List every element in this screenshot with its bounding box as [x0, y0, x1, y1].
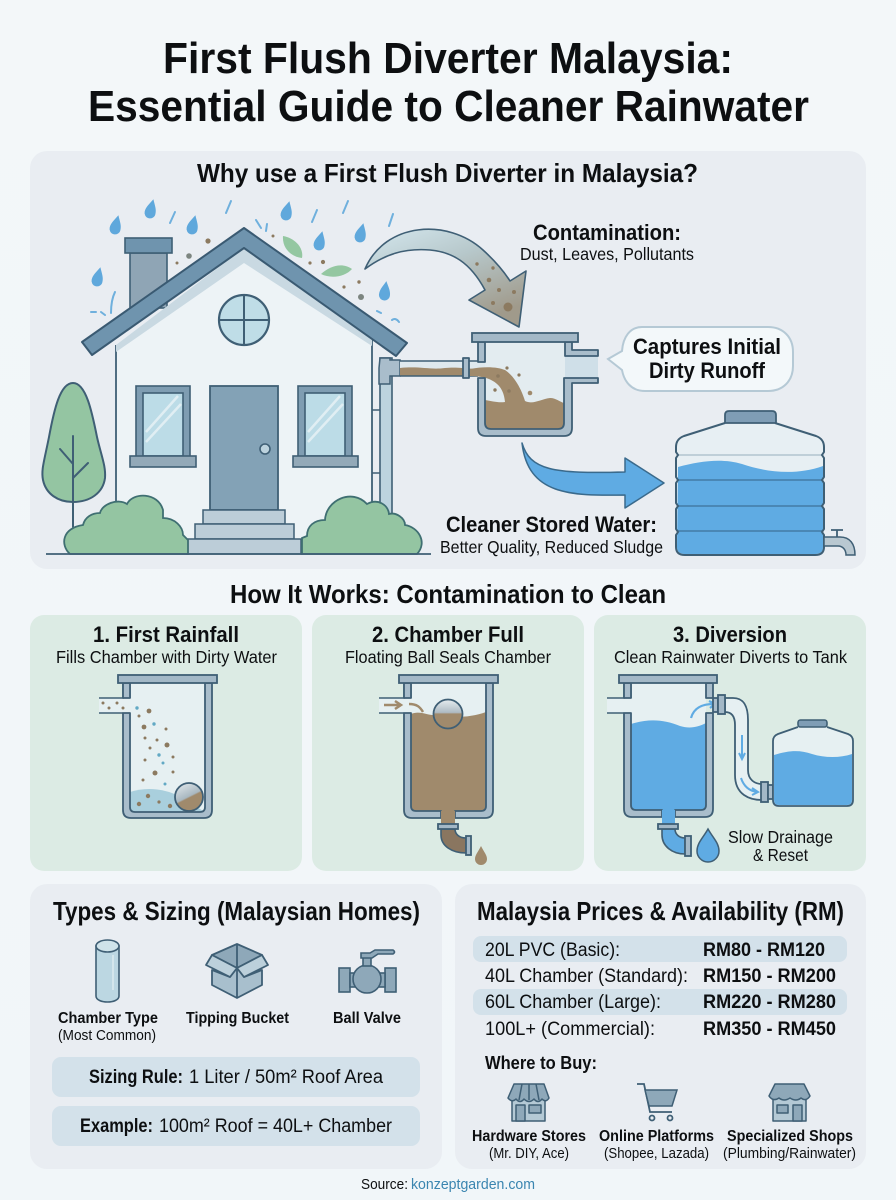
icon: hardware store	[508, 1084, 549, 1121]
label: online platforms: Online Platforms	[599, 1128, 714, 1145]
label: chamber type	[58, 1010, 158, 1044]
price table	[473, 936, 847, 1040]
label: hardware stores: Hardware Stores	[472, 1128, 586, 1145]
sizing rule bar: Sizing Rule:	[89, 1067, 183, 1088]
floating ball at bottom	[175, 783, 203, 811]
label: ball valve: Ball Valve	[333, 1010, 401, 1027]
source line	[361, 1177, 535, 1193]
text: contamination	[520, 220, 694, 264]
tap	[824, 537, 855, 555]
text: contamination: Contamination:	[533, 220, 681, 245]
step 1 chamber diagram	[99, 675, 217, 818]
curved flow arrow	[691, 701, 715, 718]
heading: why use: Why use a First Flush Diverter in Malaysia?	[197, 158, 698, 188]
source line: konzeptgarden.com	[411, 1177, 535, 1193]
step 1 description: Fills Chamber with Dirty Water	[56, 647, 277, 667]
icon: chamber cylinder	[96, 940, 119, 1002]
price table: RM80 - RM120	[703, 940, 825, 961]
dirty drip	[475, 846, 487, 865]
price table: RM350 - RM450	[703, 1019, 836, 1040]
shade below roof	[116, 248, 372, 352]
illustration: rain and debris	[90, 198, 399, 322]
sizing rule bar	[52, 1057, 420, 1097]
chamber walls	[478, 378, 598, 436]
illustration: diverter chamber	[400, 333, 598, 436]
arrow: clean water to tank	[522, 443, 664, 508]
chimney	[125, 238, 172, 308]
price table: 100L+ (Commercial):	[485, 1019, 655, 1040]
panel: step 3 diversion	[594, 615, 866, 871]
icon: ball valve	[339, 950, 396, 993]
example bar	[52, 1106, 420, 1146]
price table: 60L Chamber (Large):	[485, 992, 661, 1013]
label: online platforms	[599, 1128, 714, 1162]
heading: where to buy: Where to Buy:	[485, 1053, 597, 1073]
label: hardware stores: (Mr. DIY, Ace)	[489, 1146, 569, 1162]
step 2 heading: 2. Chamber Full	[372, 622, 524, 647]
callout: captures initial dirty runoff: Captures Initial	[633, 334, 781, 359]
illustration: storage tank	[676, 411, 855, 555]
title: Essential Guide to Cleaner Rainwater	[88, 82, 809, 131]
small tank	[773, 720, 853, 806]
price table: RM150 - RM200	[703, 966, 836, 987]
drain elbow	[662, 810, 675, 824]
arrow: contamination into chamber	[365, 229, 526, 327]
heading: how it works: How It Works: Contamination to Clean	[230, 579, 666, 609]
outlet pipe to tank	[713, 695, 773, 802]
label: specialized shops: Specialized Shops	[727, 1128, 853, 1145]
left window	[130, 386, 196, 467]
chamber interior	[485, 342, 565, 430]
text: contamination: Dust, Leaves, Pollutants	[520, 244, 694, 264]
example bar: 100m² Roof = 40L+ Chamber	[159, 1116, 393, 1137]
heading: types and sizing: Types & Sizing (Malaysian Homes)	[53, 896, 420, 926]
step 1 heading: 1. First Rainfall	[93, 622, 239, 647]
water drop	[697, 829, 719, 862]
heading: prices: Malaysia Prices & Availability (RM)	[477, 896, 844, 926]
sludge and stream	[470, 367, 564, 429]
door	[210, 386, 278, 510]
step 3 chamber diagram	[607, 675, 853, 862]
roof	[82, 228, 407, 356]
inlet pipe	[400, 361, 485, 376]
step 2 chamber diagram	[379, 675, 498, 865]
callout: captures initial dirty runoff: Dirty Runoff	[649, 358, 766, 383]
icon: tipping bucket box	[206, 944, 268, 998]
icon: specialized shop	[769, 1084, 810, 1121]
icon: shopping cart	[637, 1084, 677, 1120]
label: chamber type: Chamber Type	[58, 1010, 158, 1027]
sizing rule bar: 1 Liter / 50m² Roof Area	[189, 1067, 383, 1088]
step 3 description: Clean Rainwater Diverts to Tank	[614, 647, 847, 667]
source line: Source:	[361, 1177, 408, 1193]
panel: prices and availability	[455, 884, 866, 1169]
label: chamber type: (Most Common)	[58, 1028, 156, 1044]
house walls	[116, 248, 372, 554]
falling particles	[102, 702, 174, 808]
title: First Flush Diverter Malaysia:	[163, 34, 733, 83]
step 2 description: Floating Ball Seals Chamber	[345, 647, 551, 667]
round window	[219, 295, 269, 345]
step 3 heading: 3. Diversion	[673, 622, 787, 647]
text: cleaner stored water: Better Quality, Reduced Sludge	[440, 537, 663, 557]
price table: 40L Chamber (Standard):	[485, 966, 688, 987]
panel: types and sizing	[30, 884, 442, 1169]
panel: step 1 first rainfall	[30, 615, 302, 871]
panel: step 2 chamber full	[312, 615, 584, 871]
callout: captures initial dirty runoff	[608, 327, 793, 391]
illustration: house	[82, 228, 407, 554]
slow drainage label	[728, 827, 833, 865]
label: tipping bucket: Tipping Bucket	[186, 1010, 289, 1027]
text: cleaner stored water: Cleaner Stored Water:	[446, 512, 657, 537]
label: hardware stores	[472, 1128, 586, 1162]
floating ball sealing	[434, 700, 462, 728]
slow drainage label: Slow Drainage	[728, 827, 833, 847]
drain elbow	[441, 811, 455, 824]
right window	[293, 386, 358, 467]
text: cleaner stored water	[440, 512, 663, 557]
price table: 20L PVC (Basic):	[485, 940, 620, 961]
label: specialized shops	[723, 1128, 856, 1162]
label: online platforms: (Shopee, Lazada)	[604, 1146, 709, 1162]
label: specialized shops: (Plumbing/Rainwater)	[723, 1146, 856, 1162]
illustration: downspout	[372, 358, 400, 522]
steps	[187, 510, 301, 554]
example bar: Example:	[80, 1116, 153, 1137]
slow drainage label: & Reset	[753, 845, 808, 865]
price table: RM220 - RM280	[703, 992, 836, 1013]
panel: why use a first flush diverter	[30, 151, 866, 569]
illustration: tree	[42, 383, 105, 527]
illustration: bushes	[46, 496, 431, 554]
title	[88, 34, 809, 131]
